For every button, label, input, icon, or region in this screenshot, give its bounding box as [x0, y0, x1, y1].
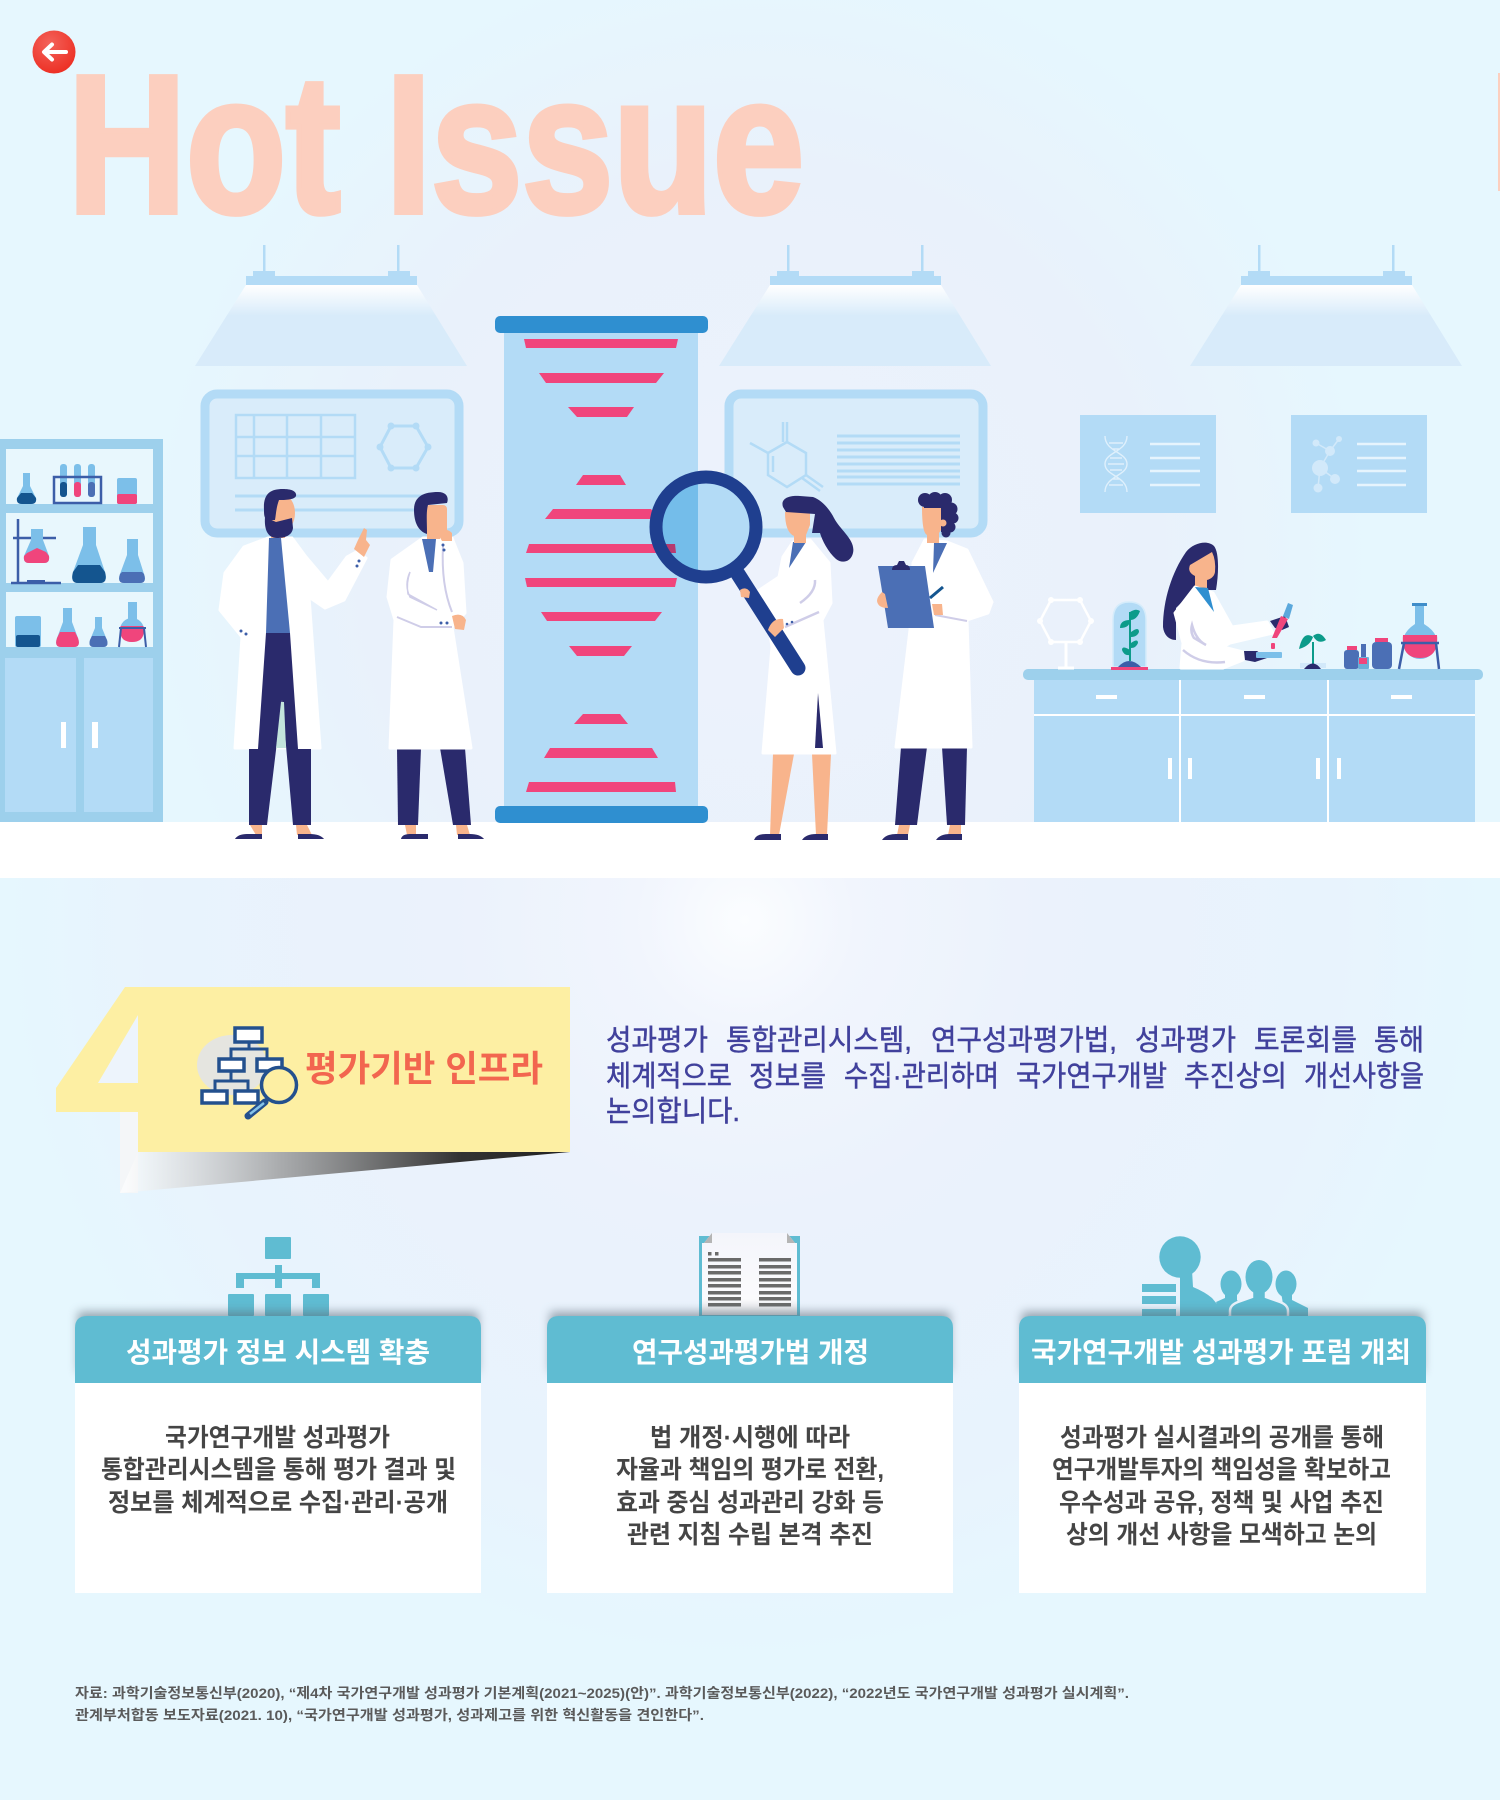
clipped title sliver at right edge: [1498, 73, 1500, 191]
source note: 자료: 과학기술정보통신부(2020), “제4차 국가연구개발 성과평가 기본계획(2021~2025)(안)”. 과학기술정보통신부(2022), “2022년도 국가연구개발 성과평가 실시계획”.: [75, 1685, 1129, 1701]
ceiling lamp 2: [719, 245, 991, 366]
intro paragraph: 성과평가: [606, 1025, 708, 1057]
bell jar with plant: [1111, 602, 1148, 670]
intro paragraph: 추진상의: [1184, 1061, 1287, 1093]
flask row 1: [17, 464, 137, 504]
intro paragraph: 연구성과평가법,: [931, 1025, 1117, 1057]
background glow: lower section: [0, 878, 1500, 1800]
card 3: [1019, 1316, 1426, 1593]
icon: forum audience: [1142, 1236, 1308, 1317]
card 2: [547, 1316, 953, 1593]
card 3: 우수성과 공유, 정책 및 사업 추진: [1059, 1489, 1384, 1517]
card 1: 통합관리시스템을 통해 평가 결과 및: [101, 1456, 456, 1484]
wall screen 2: [729, 394, 983, 533]
lab bench: [1023, 669, 1483, 822]
icon: open law book: [699, 1233, 800, 1316]
intro paragraph: 통해: [1374, 1025, 1424, 1057]
person 1: bearded scientist: [220, 489, 370, 839]
reagent bottles: [1344, 638, 1392, 669]
ribbon panel: [138, 1040, 570, 1152]
card 3: 상의 개선 사항을 모색하고 논의: [1066, 1521, 1377, 1549]
source note: [75, 1685, 1129, 1723]
intro paragraph: 국가연구개발: [1016, 1061, 1167, 1093]
person 2: scientist with hand on chin: [388, 492, 484, 839]
person 4: scientist with clipboard: [877, 492, 992, 840]
card 2: 관련 지침 수립 본격 추진: [627, 1521, 873, 1549]
card shadows: [78, 1312, 1423, 1372]
lab shelf with flasks: [0, 439, 163, 822]
magnifying glass: [656, 477, 798, 668]
card 1: 정보를 체계적으로 수집·관리·공개: [108, 1489, 448, 1517]
intro paragraph: 체계적으로: [606, 1061, 732, 1093]
card 2: 법 개정·시행에 따라: [650, 1424, 850, 1452]
round flask on tripod: [1399, 603, 1439, 669]
section heading ribbon: [56, 987, 570, 1193]
card 1: 국가연구개발 성과평가: [165, 1424, 390, 1452]
hexagon model on stand: [1037, 597, 1094, 668]
intro paragraph: [606, 1024, 1424, 1128]
ceiling lamp 1: [195, 245, 467, 366]
person 3: scientist with magnifier: [754, 496, 853, 840]
wall poster: molecule: [1291, 415, 1427, 513]
intro paragraph: 정보를: [749, 1061, 826, 1093]
large numeral 4: [56, 987, 570, 1193]
card 3: 성과평가 실시결과의 공개를 통해: [1060, 1424, 1384, 1452]
card 3: 국가연구개발 성과평가 포럼 개최: [1031, 1337, 1411, 1368]
floor: [0, 822, 1500, 878]
intro paragraph: 토론회를: [1254, 1024, 1357, 1057]
intro paragraph: 성과평가: [1135, 1025, 1236, 1057]
icon: back arrow button: [32, 30, 76, 74]
icon: hierarchy and magnifier: [197, 1028, 296, 1116]
intro paragraph: 개선사항을: [1304, 1061, 1424, 1093]
intro paragraph: 수집·관리하며: [844, 1060, 999, 1093]
flask row 2: [11, 519, 145, 584]
card 1: 성과평가 정보 시스템 확충: [126, 1337, 430, 1368]
person 5: seated scientist with pipette: [1163, 543, 1293, 668]
source note: 관계부처합동 보도자료(2021. 10), “국가연구개발 성과평가, 성과제고를 위한 혁신활동을 견인한다”.: [75, 1707, 704, 1723]
icon: organisation tree: [228, 1237, 329, 1316]
card 2: 연구성과평가법 개정: [632, 1337, 869, 1368]
card 2: 효과 중심 성과관리 강화 등: [616, 1489, 884, 1517]
title: Hot Issue: Hot Issue: [68, 35, 804, 254]
card 1: [75, 1316, 481, 1593]
wall poster: DNA: [1080, 415, 1216, 513]
card 2: 자율과 책임의 평가로 전환,: [616, 1456, 884, 1484]
heading text: 평가기반 인프라: [305, 1048, 543, 1089]
ceiling lamp 3: [1190, 245, 1462, 366]
card 3: 연구개발투자의 책임성을 확보하고: [1052, 1456, 1391, 1484]
intro paragraph: 통합관리시스템,: [726, 1025, 912, 1057]
wall screen 1: [205, 394, 459, 533]
flask row 3: [15, 602, 146, 647]
ribbon drop shadow: [120, 1152, 570, 1193]
DNA column: [495, 316, 708, 823]
seedling: [1299, 634, 1326, 669]
intro paragraph: 논의합니다.: [606, 1096, 740, 1128]
background glow: lab wall: [0, 0, 1500, 822]
